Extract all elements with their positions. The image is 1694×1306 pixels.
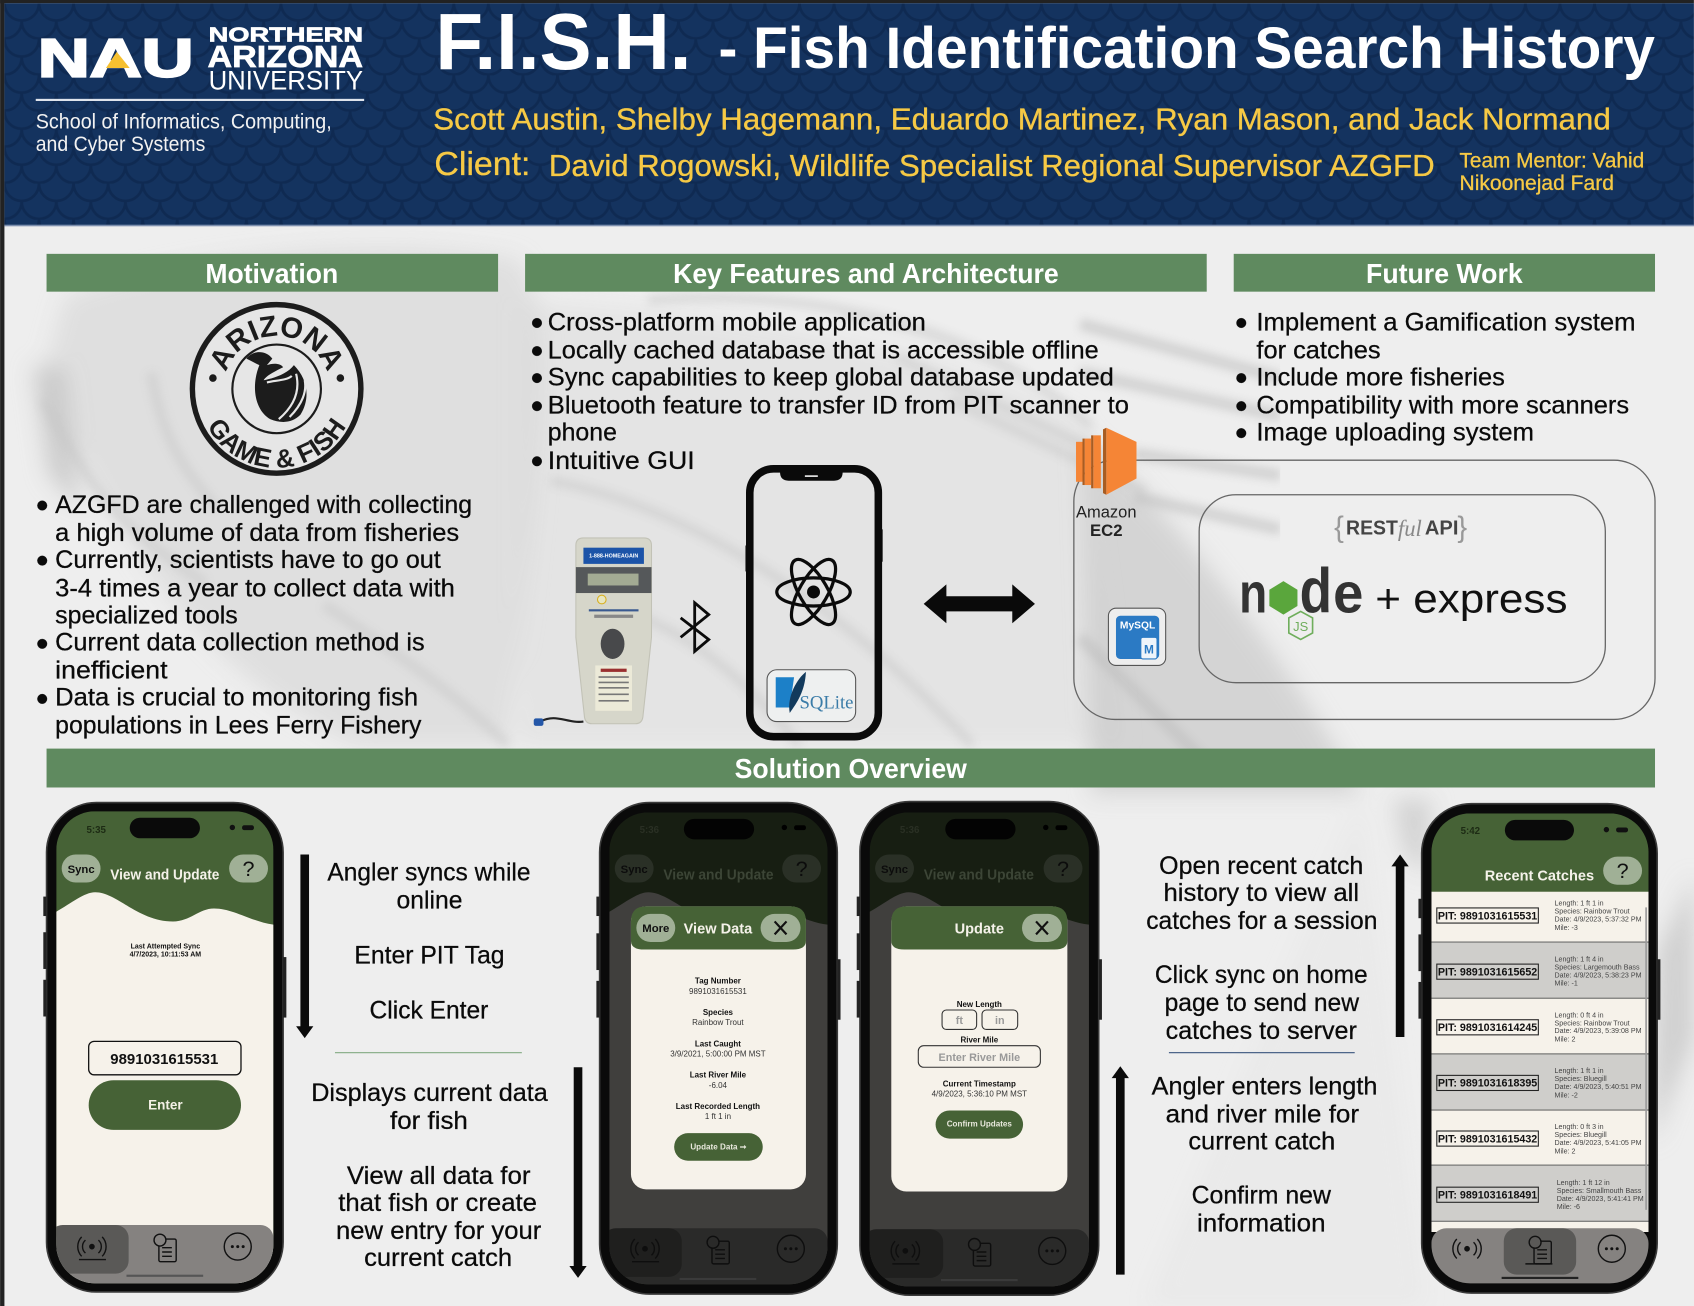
- row: catch 3: [1431, 998, 1649, 1054]
- text block: future work bullets: [1236, 309, 1636, 447]
- row: catch 3: Date: 4/9/2023, 5:39:08 PM: [1555, 1027, 1642, 1035]
- phone: home screen: ?: [243, 856, 255, 881]
- text block: view data steps: new entry for your: [336, 1217, 542, 1245]
- phone: home screen: 9891031615531: [110, 1051, 218, 1068]
- text block: key feature bullets: Intuitive GUI: [548, 447, 695, 475]
- logo: RESTful API: REST: [1346, 517, 1398, 540]
- phone: home screen: [43, 803, 286, 1292]
- modal: view data: Last Recorded Length: [676, 1102, 760, 1111]
- modal: view data: More: [642, 923, 669, 935]
- text block: key feature bullets: Sync capabilities to keep global database updated: [548, 364, 1114, 392]
- text block: update steps: [1152, 1072, 1377, 1237]
- row: catch 4: PIT: 9891031618395: [1438, 1078, 1537, 1090]
- phone: update screen: Sync: [881, 864, 908, 876]
- NAU logo: ARIZONA: [208, 41, 363, 74]
- phone: view data screen: ?: [796, 856, 808, 881]
- row: catch 2: Mile: -1: [1555, 980, 1578, 988]
- heading: future work: Future Work: [1366, 258, 1523, 289]
- background: fish watermark: [28, 249, 1694, 1124]
- logo: RESTful API: API: [1425, 517, 1458, 540]
- icon: React atom: [777, 553, 850, 631]
- icon: PIT scanner: 1-888-HOMEAGAIN: [589, 553, 638, 559]
- row: catch 1: Date: 4/9/2023, 5:37:32 PM: [1555, 915, 1642, 923]
- text block: view data steps: for fish: [390, 1107, 468, 1135]
- logo: node.js: d: [1300, 556, 1332, 626]
- phone: view data screen: 5:36: [640, 825, 660, 836]
- modal: view data: Rainbow Trout: [692, 1018, 744, 1027]
- text block: home screen steps: online: [397, 886, 462, 914]
- panel: solution overview: [43, 749, 1660, 1295]
- row: catch 1: Length: 1 ft 1 in: [1555, 899, 1604, 907]
- modal: update: River Mile: [960, 1035, 999, 1044]
- text block: key feature bullets: [532, 309, 1129, 475]
- header banner: [4, 0, 1694, 226]
- NAU logo: NAU: [38, 29, 193, 89]
- row: catch 1: PIT: 9891031615531: [1438, 910, 1537, 922]
- icon: MySQL: M: [1144, 643, 1154, 657]
- icon: SQLite: [767, 670, 856, 722]
- modal: update: Update: [955, 921, 1004, 937]
- modal: update: ft: [956, 1015, 963, 1027]
- logo: RESTful API: {: [1334, 512, 1344, 544]
- modal: view data: -6.04: [709, 1081, 728, 1090]
- modal: view data: Tag Number: [695, 976, 741, 985]
- heading: motivation: [47, 254, 498, 292]
- team mentor: Nikoonejad Fard: [1459, 172, 1614, 195]
- text block: update steps: information: [1197, 1209, 1326, 1237]
- modal: update: in: [995, 1015, 1005, 1027]
- text block: motivation bullets: Data is crucial to monitoring fish: [55, 683, 418, 711]
- text block: home screen steps: Click Enter: [370, 997, 489, 1025]
- phone: recent catches screen: ?: [1617, 858, 1629, 883]
- text block: view data steps: current catch: [364, 1244, 512, 1272]
- row: catch 2: [1431, 943, 1649, 998]
- logo: node.js: n: [1239, 561, 1267, 624]
- NAU logo: UNIVERSITY: [209, 66, 363, 96]
- row: catch 6: PIT: 9891031618491: [1438, 1190, 1537, 1202]
- modal: update: Confirm Updates: [947, 1120, 1012, 1129]
- row: catch 3: Mile: 2: [1555, 1036, 1576, 1044]
- phone: update screen: 5:36: [900, 825, 920, 836]
- phone: recent catches screen: 5:42: [1461, 826, 1481, 837]
- phone: update screen: ?: [1057, 856, 1069, 881]
- row: catch 2: Species: Largemouth Bass: [1555, 964, 1640, 972]
- school name: [36, 109, 332, 156]
- heading: key features: [525, 254, 1207, 292]
- row: catch 4: Date: 4/9/2023, 5:40:51 PM: [1555, 1083, 1642, 1091]
- modal: view data: Update Data ➞: [690, 1142, 747, 1151]
- text block: update steps: Angler enters length: [1152, 1072, 1377, 1100]
- team names: Scott Austin, Shelby Hagemann, Eduardo Martinez, Ryan Mason, and Jack Normand: [433, 104, 1611, 137]
- row: catch 5: Mile: 2: [1555, 1147, 1576, 1155]
- text block: motivation bullets: populations in Lees Ferry Fishery: [55, 711, 422, 739]
- arrow: phone to server: [924, 584, 1035, 623]
- modal: update: 4/9/2023, 5:36:10 PM MST: [932, 1089, 1027, 1098]
- text block: motivation bullets: Current data collection method is: [55, 628, 425, 656]
- row: catch 3: Length: 0 ft 4 in: [1555, 1011, 1604, 1019]
- panel: server architecture: [1074, 428, 1655, 719]
- modal: view data: View Data: [684, 921, 753, 937]
- phone: update screen: View and Update: [924, 866, 1034, 883]
- text block: future work bullets: for catches: [1256, 337, 1381, 365]
- modal: view data: Last River Mile: [690, 1071, 747, 1080]
- modal: view data: 1 ft 1 in: [705, 1112, 731, 1121]
- row: catch 6: Mile: -6: [1557, 1203, 1580, 1211]
- heading: solution overview: [47, 749, 1655, 787]
- panel: motivation: [37, 254, 498, 739]
- row: catch 5: Species: Bluegill: [1555, 1131, 1607, 1139]
- text block: history steps: catches to server: [1166, 1017, 1357, 1045]
- text block: future work bullets: Compatibility with more scanners: [1256, 392, 1629, 420]
- text block: history steps: Open recent catch: [1159, 852, 1363, 880]
- text block: motivation bullets: [37, 491, 472, 739]
- icon: MySQL: [1108, 608, 1166, 665]
- text block: motivation bullets: 3-4 times a year to collect data with: [55, 574, 455, 602]
- row: catch 3: PIT: 9891031614245: [1438, 1022, 1537, 1034]
- client: Client:: [434, 146, 530, 183]
- team mentor: [1459, 149, 1644, 195]
- text block: home screen steps: Angler syncs while: [327, 858, 530, 886]
- heading: solution overview: Solution Overview: [735, 753, 967, 784]
- text block: view data steps: Displays current data: [311, 1079, 549, 1107]
- row: catch 4: Species: Bluegill: [1555, 1075, 1607, 1083]
- school name: and Cyber Systems: [36, 131, 206, 156]
- logo: node.js: e: [1333, 561, 1363, 624]
- NAU logo: NORTHERN: [209, 25, 363, 47]
- icon: phone with React and SQLite: [745, 469, 883, 737]
- icon: Amazon EC2: Amazon: [1076, 502, 1137, 521]
- row: catch 6: Length: 1 ft 12 in: [1557, 1179, 1610, 1187]
- text block: update steps: current catch: [1188, 1127, 1335, 1155]
- icon: Arizona Game and Fish seal: GAME & FISH: [210, 418, 346, 468]
- phone: view data screen: [596, 803, 841, 1294]
- text block: future work bullets: Implement a Gamification system: [1256, 309, 1636, 337]
- row: catch 2: Date: 4/9/2023, 5:38:23 PM: [1555, 971, 1642, 979]
- row: catch 5: Length: 0 ft 3 in: [1555, 1123, 1604, 1131]
- text block: update steps: Confirm new: [1192, 1181, 1332, 1209]
- row: catch 6: Species: Smallmouth Bass: [1557, 1187, 1642, 1195]
- school name: School of Informatics, Computing,: [36, 109, 332, 134]
- modal: view data: [631, 906, 806, 1189]
- phone: view data screen: View and Update: [663, 866, 774, 883]
- text block: future work bullets: Image uploading system: [1256, 419, 1534, 447]
- row: catch 6: Date: 4/9/2023, 5:41:41 PM: [1557, 1195, 1644, 1203]
- text block: motivation bullets: specialized tools: [55, 601, 238, 629]
- text block: motivation bullets: AZGFD are challenged with collecting: [55, 491, 472, 519]
- heading: motivation: Motivation: [205, 258, 338, 289]
- text block: future work bullets: Include more fisheries: [1256, 364, 1505, 392]
- text block: key feature bullets: Locally cached database that is accessible offline: [548, 337, 1099, 365]
- text block: history steps: Click sync on home: [1155, 961, 1368, 989]
- text block: key feature bullets: phone: [548, 419, 617, 447]
- text block: history steps: history to view all: [1164, 879, 1359, 907]
- icon: SQLite: SQLite: [799, 693, 853, 714]
- text block: key feature bullets: Cross-platform mobile application: [548, 309, 926, 337]
- icon: MySQL: MySQL: [1120, 621, 1155, 632]
- icon: Arizona Game and Fish seal: ARIZONA: [212, 316, 342, 372]
- text block: view data steps: that fish or create: [338, 1189, 537, 1217]
- title: - Fish Identification Search History: [718, 16, 1656, 81]
- text block: history steps: catches for a session: [1146, 907, 1377, 935]
- NAU logo: [36, 25, 364, 101]
- team mentor: Team Mentor: Vahid: [1459, 149, 1644, 172]
- phone: home screen: View and Update: [110, 866, 219, 883]
- icon: Amazon EC2: EC2: [1090, 521, 1123, 540]
- text block: motivation bullets: inefficient: [55, 656, 168, 684]
- icon: PIT scanner: [534, 538, 651, 726]
- row: catch 1: Species: Rainbow Trout: [1555, 908, 1630, 916]
- heading: future work: [1234, 254, 1655, 292]
- modal: update: Enter River Mile: [939, 1052, 1020, 1064]
- modal: update: Current Timestamp: [943, 1079, 1016, 1088]
- arrow: down, second steps: [569, 1067, 587, 1278]
- phone: update screen: [857, 802, 1102, 1295]
- icon: bluetooth: [681, 603, 709, 651]
- logo: express: + express: [1375, 575, 1568, 621]
- row: catch 1: Mile: -3: [1555, 924, 1578, 932]
- modal: view data: 9891031615531: [689, 987, 747, 996]
- arrow: up, third steps: [1112, 1066, 1129, 1275]
- logo: node.js: JS: [1293, 619, 1309, 634]
- phone: recent catches screen: Recent Catches: [1485, 868, 1594, 884]
- text block: motivation bullets: a high volume of data from fisheries: [55, 519, 459, 547]
- arrow: down, first steps: [296, 854, 313, 1038]
- phone: home screen: Enter: [148, 1097, 183, 1112]
- text block: motivation bullets: Currently, scientists have to go out: [55, 546, 441, 574]
- phone: home screen: Last Attempted Sync: [131, 943, 200, 950]
- row: catch 2: PIT: 9891031615652: [1438, 966, 1537, 978]
- row: catch 4: [1431, 1054, 1649, 1110]
- text block: history steps: [1146, 852, 1377, 1045]
- row: catch 5: PIT: 9891031615432: [1438, 1133, 1537, 1145]
- panel: API: [1199, 495, 1605, 683]
- text block: home screen steps: Enter PIT Tag: [354, 942, 505, 970]
- modal: view data: Species: [703, 1008, 734, 1017]
- logo: node.js: [1239, 556, 1363, 639]
- logo: RESTful API: [1334, 512, 1467, 544]
- modal: update: New Length: [957, 1000, 1002, 1009]
- heading: key features: Key Features and Architecture: [673, 258, 1059, 289]
- panel: future work: [1234, 254, 1655, 447]
- phone: home screen: 4/7/2023, 10:11:53 AM: [130, 952, 201, 959]
- row: catch 6: [1431, 1165, 1649, 1221]
- phone: home screen: 5:35: [87, 825, 107, 836]
- text block: history steps: page to send new: [1165, 989, 1360, 1017]
- icon: Amazon EC2: [1076, 428, 1137, 540]
- modal: update: [891, 906, 1067, 1191]
- phone: view data screen: Sync: [621, 864, 648, 876]
- logo: RESTful API: }: [1457, 512, 1467, 544]
- arrow: up, fourth steps: [1391, 854, 1409, 1037]
- icon: Arizona Game and Fish seal: [190, 302, 364, 476]
- panel: key features and architecture: [525, 254, 1655, 737]
- row: catch 2: Length: 1 ft 4 in: [1555, 955, 1604, 963]
- text block: key feature bullets: Bluetooth feature to transfer ID from PIT scanner to: [548, 392, 1129, 420]
- phone: home screen: Sync: [68, 864, 95, 876]
- title: [435, 0, 1656, 86]
- row: catch 4: Mile: -2: [1555, 1091, 1578, 1099]
- row: catch 1: [1431, 892, 1649, 943]
- row: catch 5: [1431, 1110, 1649, 1165]
- modal: view data: 3/9/2021, 5:00:00 PM MST: [670, 1049, 766, 1058]
- text block: view data steps: [311, 1079, 549, 1272]
- client: David Rogowski, Wildlife Specialist Regional Supervisor AZGFD: [549, 150, 1435, 183]
- row: catch 5: Date: 4/9/2023, 5:41:05 PM: [1555, 1139, 1642, 1147]
- row: catch 3: Species: Rainbow Trout: [1555, 1019, 1630, 1027]
- text block: home screen steps: [327, 858, 530, 1025]
- phone: recent catches screen: [1418, 804, 1660, 1293]
- row: catch 4: Length: 1 ft 1 in: [1555, 1067, 1604, 1075]
- text block: view data steps: View all data for: [347, 1162, 531, 1190]
- logo: RESTful API: ful: [1398, 516, 1422, 541]
- modal: view data: Last Caught: [695, 1040, 741, 1049]
- text block: update steps: and river mile for: [1166, 1100, 1360, 1128]
